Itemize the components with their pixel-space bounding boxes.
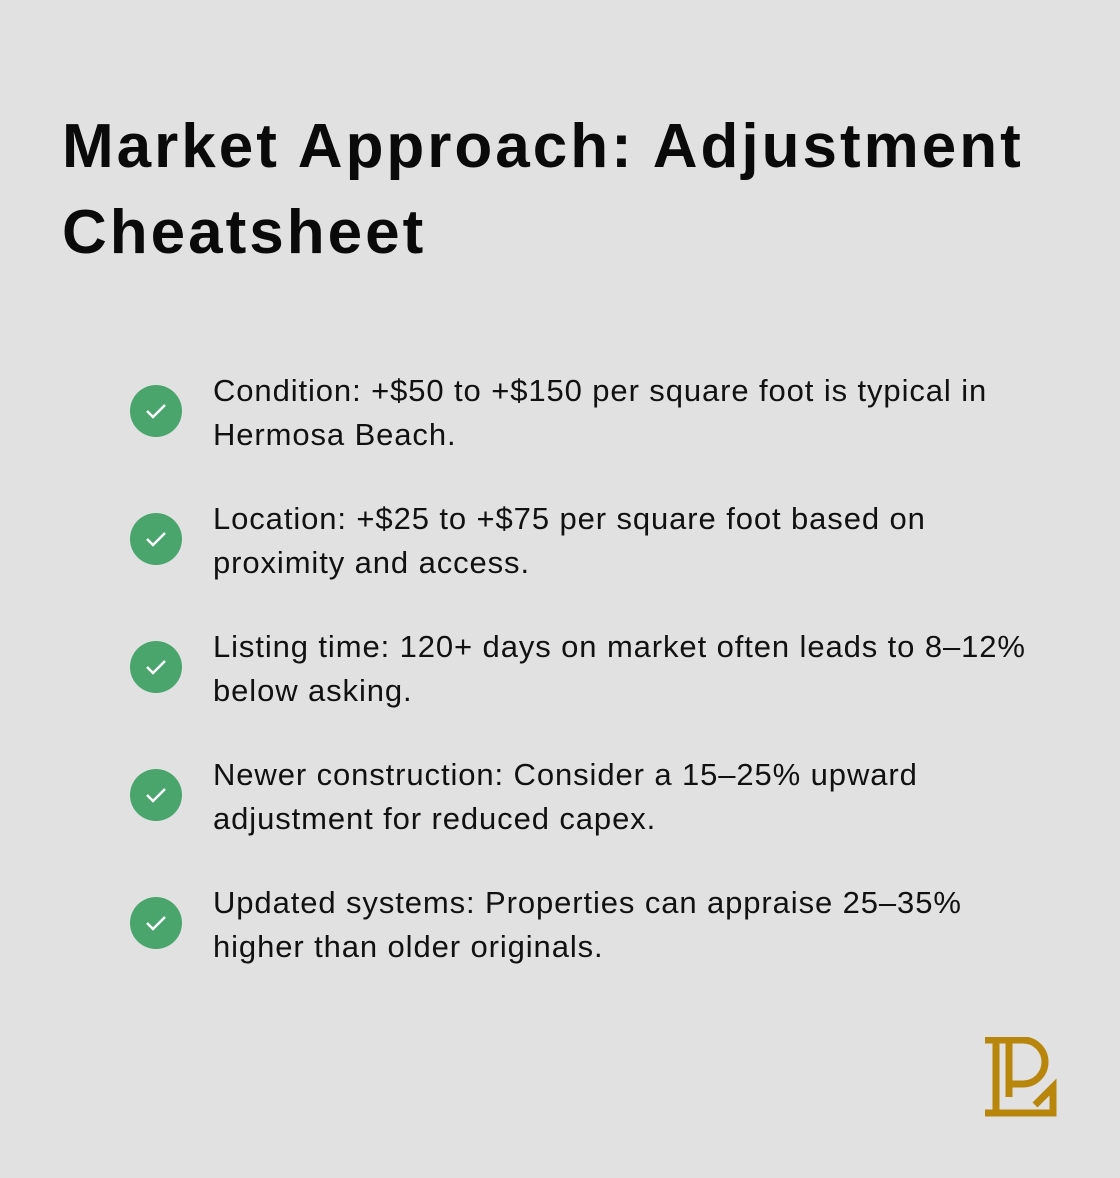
title: Cheatsheet [62, 198, 426, 267]
item: updated systems [130, 885, 962, 964]
text: location: proximity and access. [213, 545, 530, 580]
text: condition [213, 373, 987, 452]
text: listing time: below asking. [213, 673, 413, 708]
text: newer construction: Newer construction: Consider a 15–25% upward [213, 757, 918, 792]
text: condition: Condition: +$50 to +$150 per square foot is typical in [213, 373, 987, 408]
item: newer construction [130, 757, 918, 836]
text: updated systems: higher than older originals. [213, 929, 604, 964]
icon: check [130, 385, 182, 437]
text: location [213, 501, 926, 580]
text: listing time: Listing time: 120+ days on market often leads to 8–12% [213, 629, 1026, 664]
text: condition: Hermosa Beach. [213, 417, 456, 452]
text: newer construction: adjustment for reduced capex. [213, 801, 656, 836]
title [62, 112, 1024, 267]
icon: check [130, 897, 182, 949]
text: updated systems: Updated systems: Properties can appraise 25–35% [213, 885, 962, 920]
text: location: Location: +$25 to +$75 per square foot based on [213, 501, 926, 536]
item: listing time [130, 629, 1026, 708]
icon: check [130, 513, 182, 565]
icon: check [130, 641, 182, 693]
text: updated systems [213, 885, 962, 964]
text: newer construction [213, 757, 918, 836]
icon: check [130, 769, 182, 821]
logo [985, 1037, 1056, 1116]
text: listing time [213, 629, 1026, 708]
item: location [130, 501, 926, 580]
item: condition [130, 373, 987, 452]
title: Market Approach: Adjustment [62, 112, 1024, 181]
